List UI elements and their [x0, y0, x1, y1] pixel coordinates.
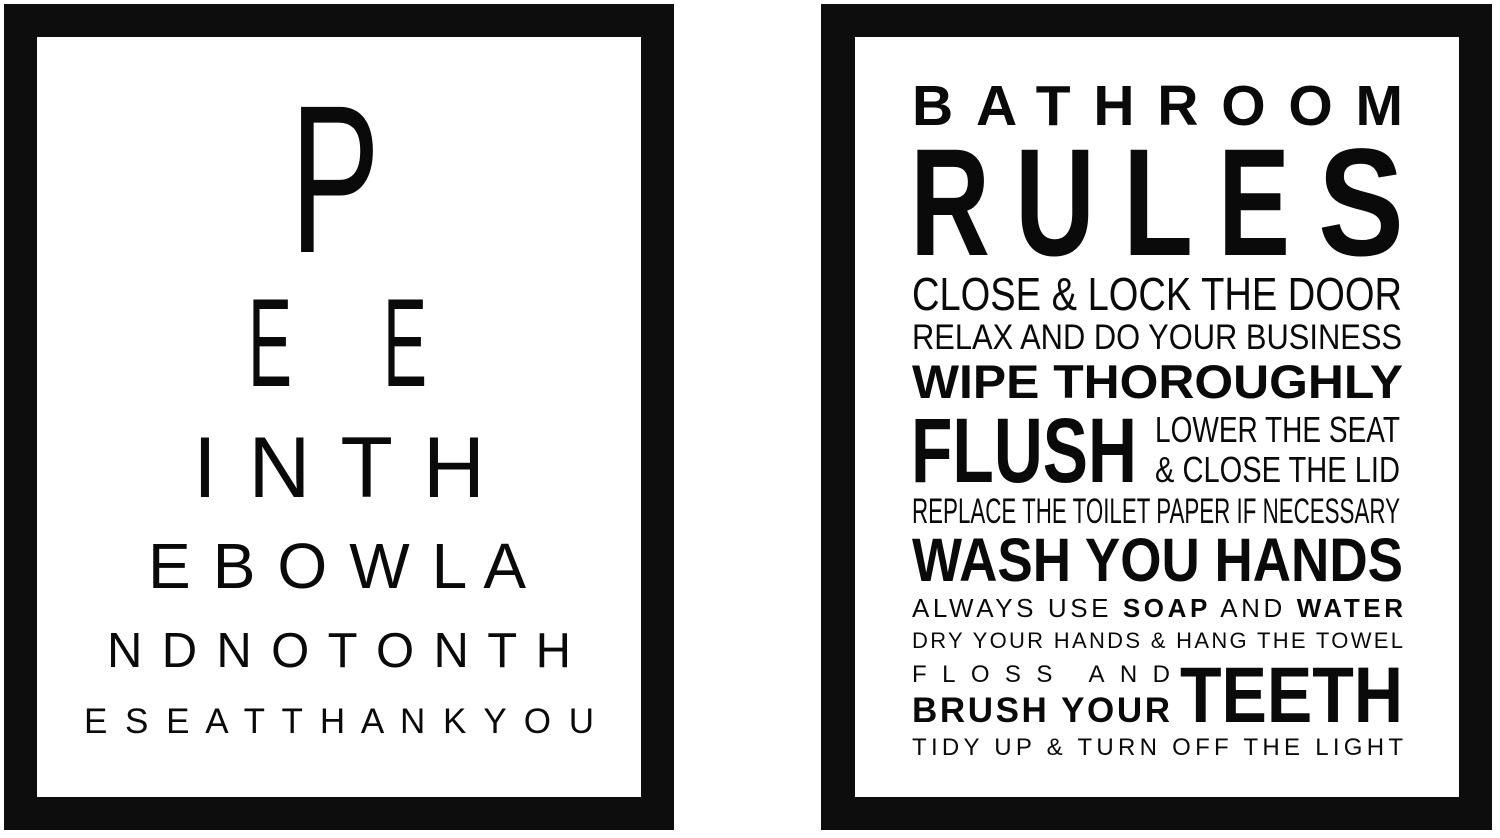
panel: left frame eye chart — [4, 4, 674, 830]
heading: rules: R — [910, 117, 990, 288]
rule: flush: FLUSH — [911, 400, 1137, 502]
eye chart row 2 — [248, 274, 427, 413]
rule: lower seat: LOWER THE SEAT — [1155, 409, 1400, 450]
rule: teeth: TEETH — [1180, 650, 1403, 739]
eye chart row 2: E — [383, 274, 427, 413]
eye chart row 4: E B O W L A — [148, 530, 526, 602]
heading: rules: U — [1015, 117, 1095, 288]
rule: close lid: & CLOSE THE LID — [1155, 449, 1400, 490]
eye chart row 1: P — [290, 61, 380, 297]
panel: right frame bathroom rules — [821, 4, 1492, 830]
eye chart row 3: I N T H — [193, 420, 485, 516]
rule: wash hands: WASH YOU HANDS — [912, 526, 1403, 594]
rule: tidy up: TIDY UP & TURN OFF THE LIGHT — [912, 734, 1403, 761]
rule: floss and: FLOSS AND — [912, 661, 1170, 688]
rule: wipe: WIPE THOROUGHLY — [912, 355, 1403, 408]
heading: rules: S — [1318, 117, 1404, 288]
eye chart row 2: E — [248, 274, 292, 413]
eye chart row 6: E S E A T T H A N K Y O U — [84, 702, 594, 741]
heading: rules: E — [1218, 117, 1290, 288]
rule: dry hands: DRY YOUR HANDS & HANG THE TOWEL — [912, 628, 1403, 653]
rule: close lock: CLOSE & LOCK THE DOOR — [912, 268, 1402, 320]
heading: rules: L — [1123, 117, 1193, 288]
rule: relax: RELAX AND DO YOUR BUSINESS — [912, 318, 1402, 357]
rule: brush your: BRUSH YOUR — [912, 691, 1170, 730]
rule: soap water: ALWAYS USE SOAP AND WATER — [912, 593, 1403, 623]
eye chart row 5: N D N O T O N T H — [107, 624, 571, 678]
heading: rules — [910, 117, 1404, 288]
heading: bathroom: BATHROOM — [912, 74, 1403, 138]
